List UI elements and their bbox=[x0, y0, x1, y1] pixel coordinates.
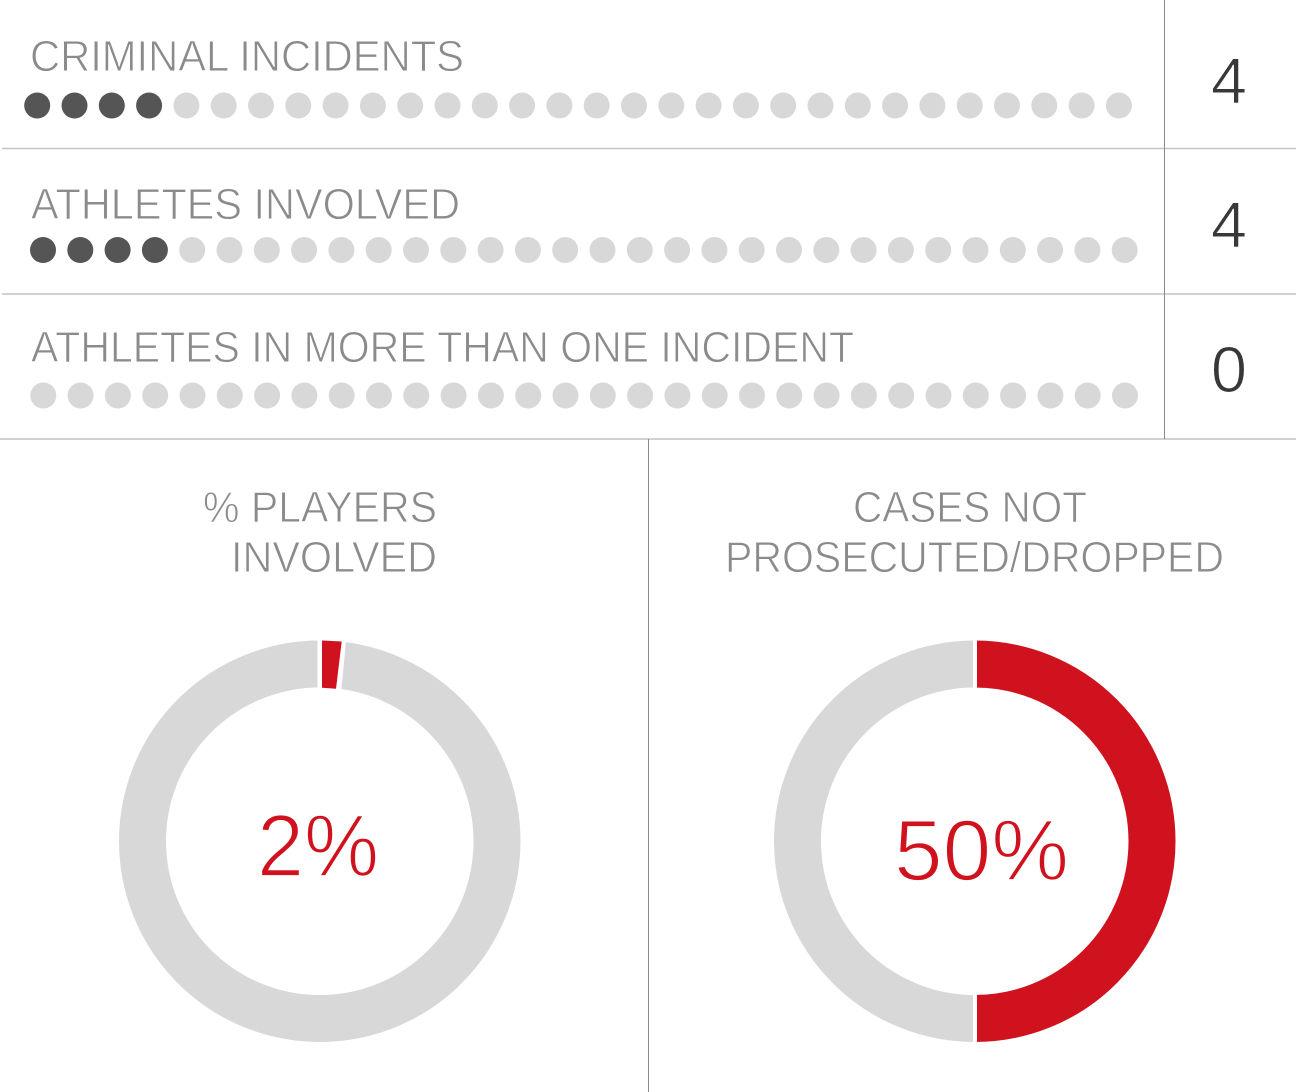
value: 50%: 50% bbox=[894, 803, 1069, 899]
heading: athletes involved: ATHLETES INVOLVED bbox=[31, 180, 460, 229]
heading: percent players involved bbox=[203, 483, 437, 582]
dot row: 0 of 30 athletes bbox=[30, 382, 1138, 408]
heading: athletes in more than one incident: ATHLETES IN MORE THAN ONE INCIDENT bbox=[31, 323, 854, 372]
value: criminal incidents: 4 bbox=[1211, 44, 1247, 117]
heading: percent players involved: INVOLVED bbox=[231, 533, 437, 582]
value: athletes involved: 4 bbox=[1211, 188, 1247, 261]
heading: cases not prosecuted or dropped bbox=[725, 483, 1224, 582]
heading: cases not prosecuted or dropped: PROSECUTED/DROPPED bbox=[725, 533, 1224, 582]
dot row: 4 of 30 incidents bbox=[24, 92, 1132, 118]
row: athletes involved bbox=[30, 180, 1247, 263]
donut chart: 2% bbox=[142, 636, 497, 1018]
donut chart: 50% bbox=[798, 636, 1152, 1046]
heading: cases not prosecuted or dropped: CASES NOT bbox=[853, 483, 1087, 532]
heading: criminal incidents: CRIMINAL INCIDENTS bbox=[30, 32, 464, 81]
row: criminal incidents bbox=[24, 32, 1247, 118]
value: 2%: 2% bbox=[257, 796, 379, 895]
panel: cases not prosecuted or dropped bbox=[725, 483, 1224, 1046]
value: athletes in more than one incident: 0 bbox=[1211, 333, 1247, 406]
row: athletes in more than one incident bbox=[30, 323, 1247, 408]
heading: percent players involved: % PLAYERS bbox=[203, 483, 437, 532]
dot row: 4 of 30 athletes bbox=[30, 237, 1138, 263]
panel: percent players involved bbox=[142, 483, 497, 1018]
